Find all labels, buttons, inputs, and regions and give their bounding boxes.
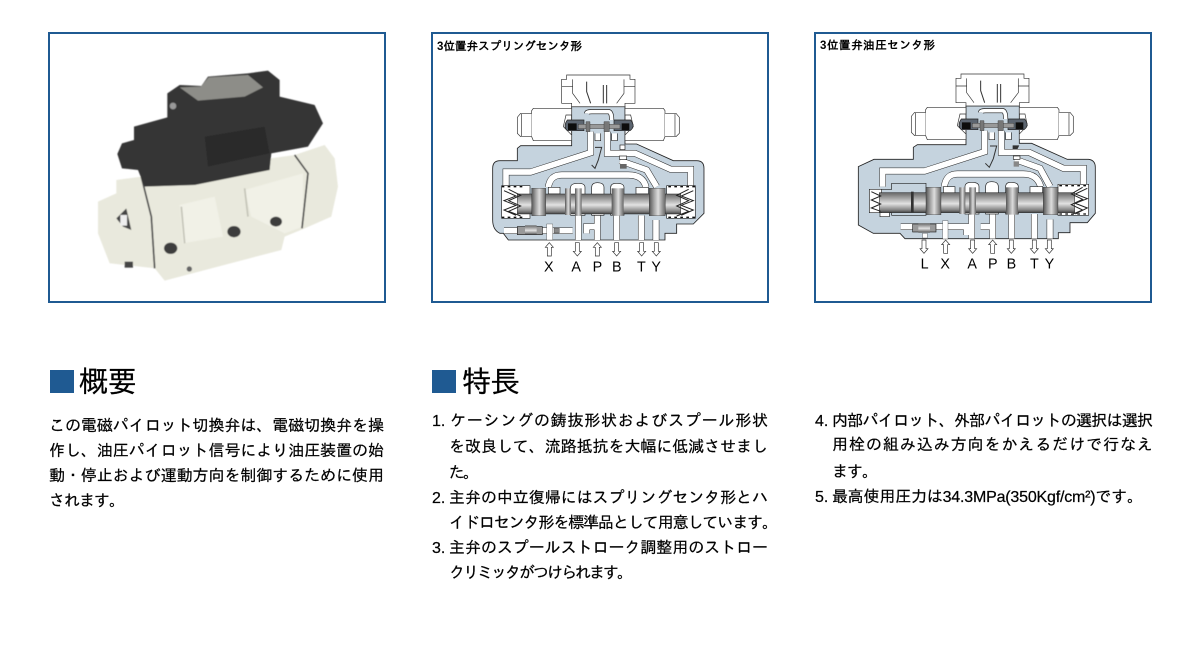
port labels: X bbox=[544, 259, 554, 275]
panel: hydro centered diagram bbox=[815, 33, 1151, 302]
body bbox=[858, 106, 1095, 239]
head bbox=[956, 74, 1029, 106]
port labels: A bbox=[967, 257, 977, 273]
text block: features 1 to 3: 2. bbox=[432, 490, 445, 507]
pilot valve bbox=[959, 119, 1027, 130]
text block: overview bbox=[49, 417, 384, 510]
text block: features 1 to 3: クリミッタがつけられます。 bbox=[449, 564, 633, 582]
text block: features 1 to 3: ケーシングの鋳抜形状およびスプール形状 bbox=[450, 412, 768, 430]
text block: features 4 to 5 bbox=[815, 412, 1153, 506]
port labels: P bbox=[988, 257, 998, 273]
springs bbox=[871, 192, 881, 211]
text block: features 4 to 5: 最高使用圧力は34.3MPa(350Kgf/cm²)です。 bbox=[832, 488, 1143, 506]
text block: features 1 to 3: を改良して、流路抵抗を大幅に低減させまし bbox=[449, 438, 768, 456]
vent and check bbox=[985, 146, 997, 167]
heading: features: 特長 bbox=[462, 366, 520, 399]
text block: features 4 to 5: 用栓の組み込み方向をかえるだけで行なえ bbox=[832, 436, 1153, 454]
text block: overview: されます。 bbox=[49, 493, 125, 510]
text block: features 4 to 5: 5. bbox=[815, 489, 828, 506]
port arrows bbox=[920, 240, 1053, 253]
cutaway diagram: hydro centered bbox=[858, 74, 1095, 273]
body bbox=[493, 107, 704, 240]
spool bbox=[879, 193, 1075, 213]
passages bbox=[883, 111, 1083, 239]
diagram title: 3位置弁油圧センタ形 bbox=[820, 38, 936, 52]
heading: features bbox=[432, 366, 520, 399]
text block: features 1 to 3 bbox=[432, 412, 778, 582]
pilot valve bbox=[565, 120, 633, 131]
text block: features 1 to 3: 3. bbox=[432, 540, 445, 557]
text block: features 4 to 5: ます。 bbox=[832, 464, 878, 481]
port labels bbox=[921, 257, 1055, 273]
panel: product photo bbox=[49, 33, 385, 302]
photo: solenoid valve bbox=[98, 71, 338, 281]
text block: overview: 動・停止および運動方向を制御するために使用 bbox=[49, 467, 384, 485]
diagram title: 3位置弁スプリングセンタ形 bbox=[437, 39, 582, 53]
heading: overview: 概要 bbox=[79, 366, 137, 399]
chambers bbox=[502, 186, 695, 218]
springs bbox=[504, 189, 521, 216]
chambers bbox=[869, 183, 926, 215]
text block: features 4 to 5: 4. bbox=[815, 413, 828, 430]
port labels bbox=[544, 259, 661, 275]
text block: features 1 to 3: た。 bbox=[449, 465, 479, 482]
port labels: B bbox=[1007, 257, 1016, 273]
text block: overview: この電磁パイロット切換弁は、電磁切換弁を操 bbox=[49, 417, 384, 435]
L/X pilot spool bbox=[913, 224, 936, 232]
port labels: P bbox=[593, 259, 602, 275]
port labels: T bbox=[1030, 257, 1039, 273]
text block: features 1 to 3: 主弁のスプールストローク調整用のストロー bbox=[449, 539, 768, 557]
text block: features 1 to 3: 1. bbox=[432, 413, 445, 430]
heading: overview bbox=[50, 366, 137, 399]
L/X pilot spool bbox=[517, 227, 542, 235]
port labels: Y bbox=[651, 259, 661, 275]
solenoids bbox=[532, 108, 572, 141]
vent and check bbox=[592, 147, 602, 168]
port labels: T bbox=[637, 259, 646, 275]
cutaway diagram: spring centered bbox=[493, 75, 704, 275]
panel: spring centered diagram bbox=[432, 33, 768, 302]
head bbox=[562, 75, 635, 107]
port labels: X bbox=[940, 257, 950, 273]
text block: overview: 作し、油圧パイロット信号により油圧装置の始 bbox=[49, 442, 384, 460]
text block: features 1 to 3: 主弁の中立復帰にはスプリングセンタ形とハ bbox=[449, 489, 768, 507]
port labels: Y bbox=[1045, 257, 1055, 273]
text block: features 4 to 5: 内部パイロット、外部パイロットの選択は選択 bbox=[832, 412, 1153, 430]
port labels: B bbox=[612, 259, 622, 275]
passages bbox=[504, 112, 691, 240]
port arrows bbox=[545, 243, 660, 256]
text block: features 1 to 3: イドロセンタ形を標準品として用意しています。 bbox=[449, 514, 778, 532]
port labels: A bbox=[571, 259, 581, 275]
solenoids bbox=[926, 107, 966, 140]
spool bbox=[517, 194, 681, 214]
port labels: L bbox=[921, 257, 929, 273]
